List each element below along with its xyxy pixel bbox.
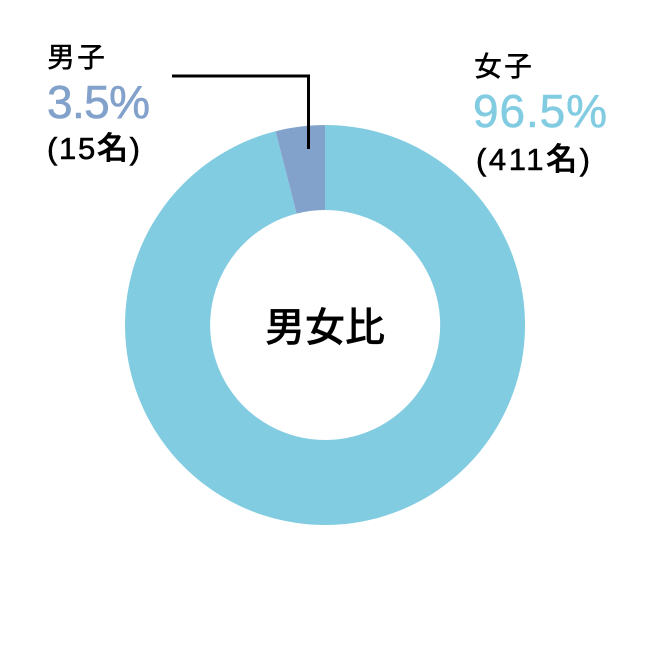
female percentage: 96.5% xyxy=(473,85,607,137)
female heading: 女子 xyxy=(474,51,534,82)
leader line: male label to segment xyxy=(172,76,308,149)
center title: 男女比 xyxy=(265,306,385,350)
segment: male 3.5% xyxy=(276,125,325,214)
female count: (411名) xyxy=(476,142,590,177)
male percentage: 3.5% xyxy=(47,76,150,128)
male count: (15名) xyxy=(47,131,140,166)
male heading: 男子 xyxy=(47,42,107,73)
label: male xyxy=(47,42,150,166)
label: female xyxy=(473,51,607,177)
segment: female 96.5% xyxy=(125,125,525,525)
donut chart xyxy=(125,125,525,525)
